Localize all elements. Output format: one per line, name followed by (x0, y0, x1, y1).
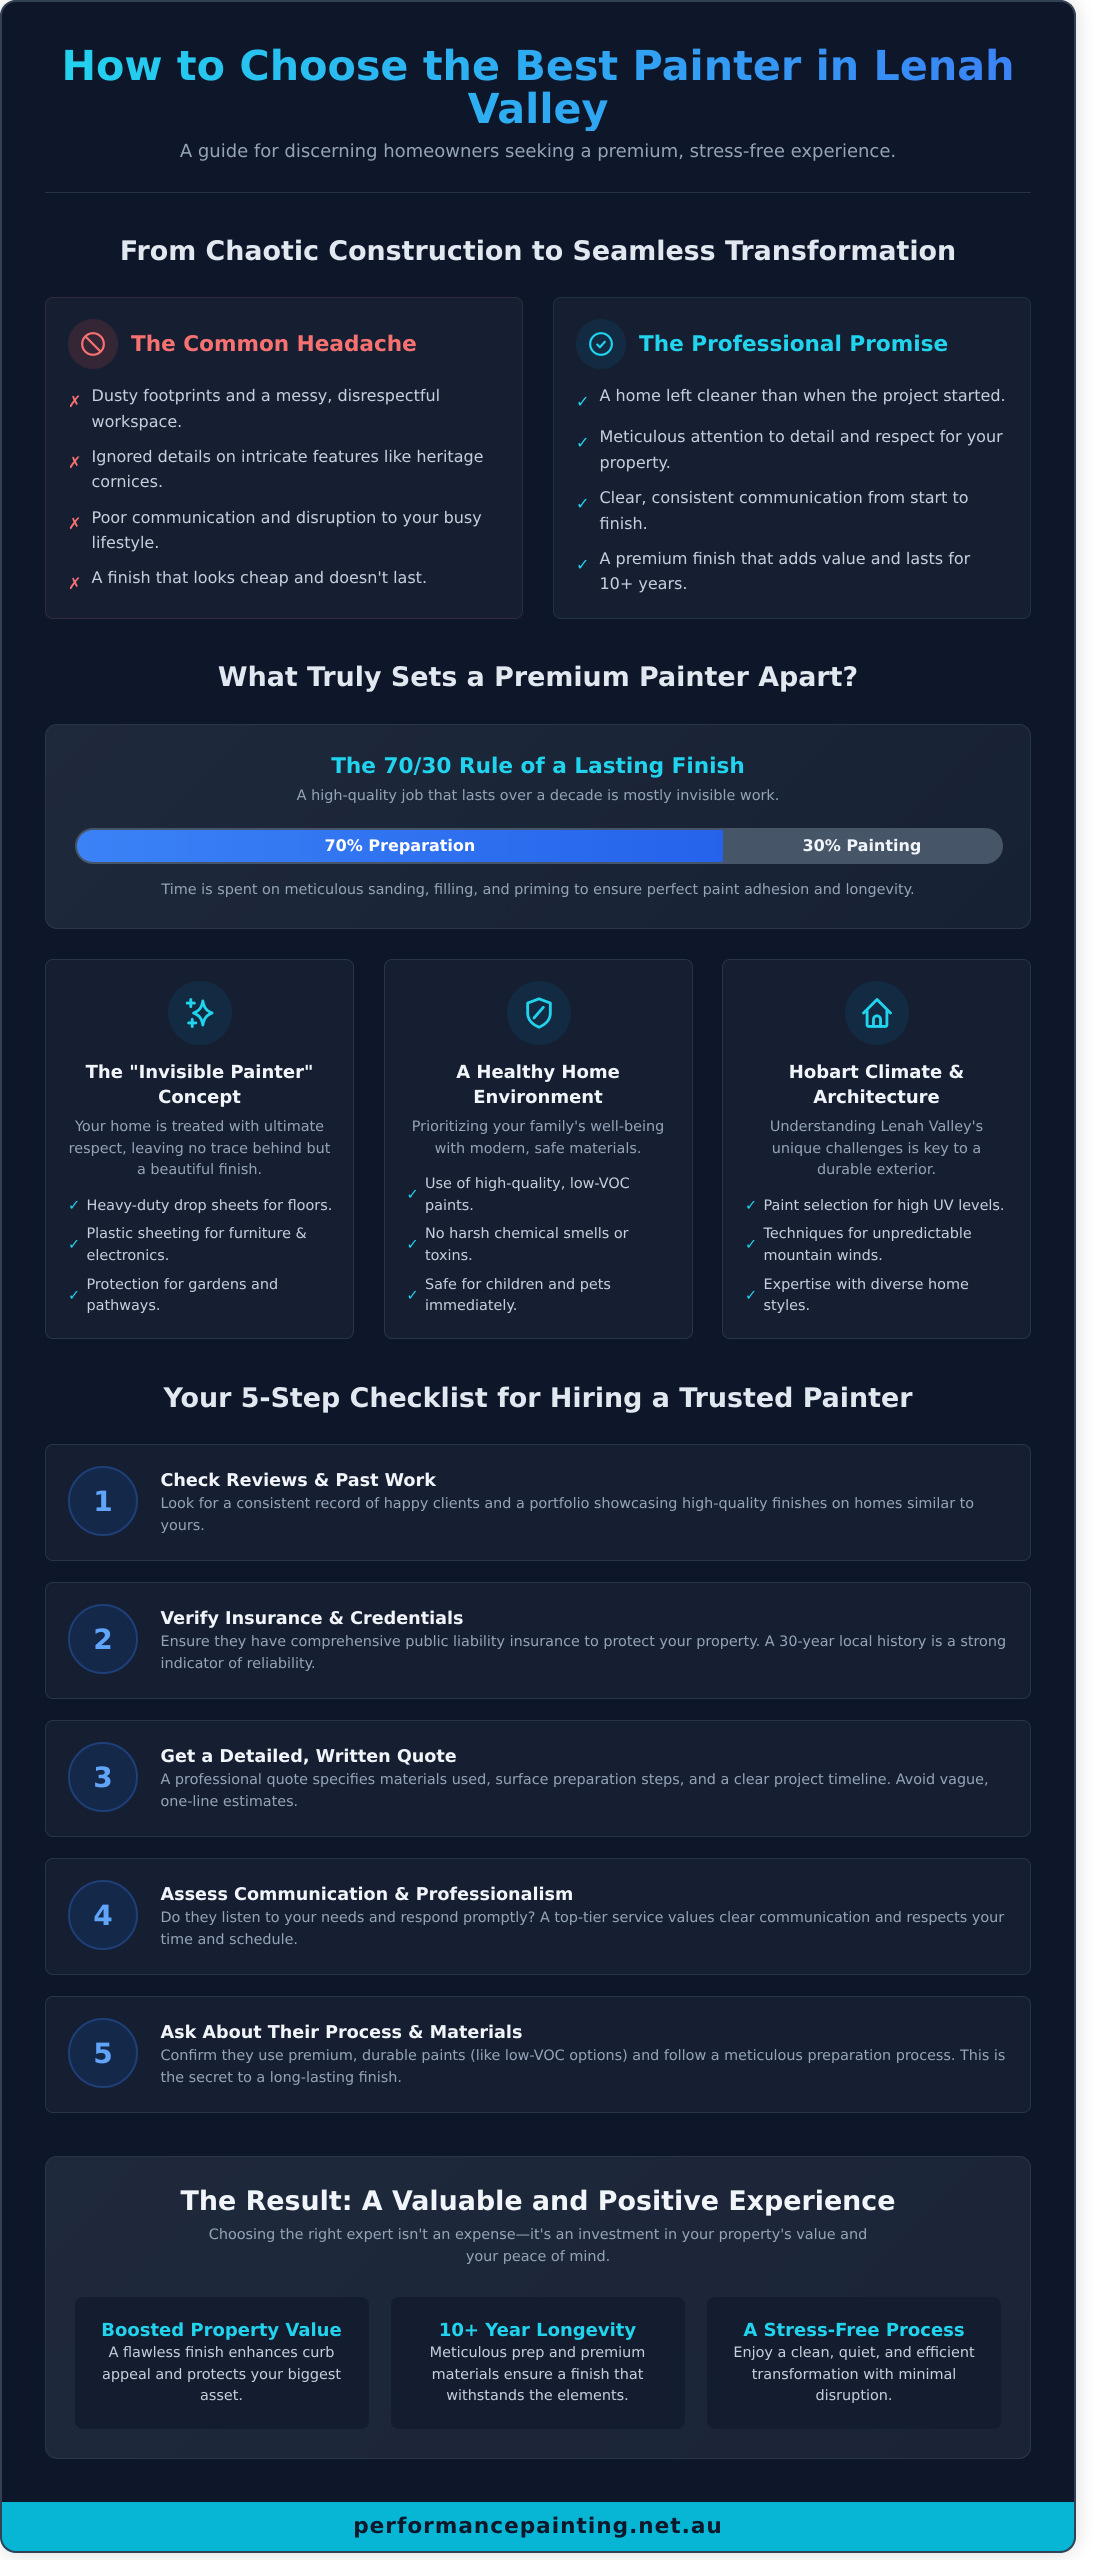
benefit text: transformation with minimal (752, 2367, 956, 2383)
card heading: Hobart Climate & (789, 1062, 964, 1083)
feature list: ✓ (406, 1187, 419, 1203)
panel: hobart climate (722, 959, 1031, 1339)
feature list: Heavy-duty drop sheets for floors. (86, 1198, 332, 1214)
feature list: Techniques for unpredictable (764, 1226, 972, 1242)
benefit text: A flawless finish enhances curb (109, 2345, 334, 2361)
rule caption: Time is spent on meticulous sanding, filling, and priming to ensure perfect paint adhesion and longevity. (161, 882, 915, 898)
step number (68, 2018, 138, 2088)
feature list (745, 1198, 1004, 1314)
icon: shield check (506, 981, 570, 1045)
feature list: ✓ (406, 1288, 419, 1304)
step description (160, 1772, 989, 1810)
step 2 (45, 1582, 1031, 1698)
step description: A professional quote specifies materials used, surface preparation steps, and a clear project timeline. Avoid vague, (160, 1772, 989, 1788)
feature list: ✓ (68, 1237, 80, 1253)
step number (68, 1880, 138, 1950)
panel: healthy home (384, 959, 692, 1339)
feature list: ✓ (745, 1288, 757, 1304)
list of problems: lifestyle. (92, 533, 159, 552)
card description: durable exterior. (817, 1162, 936, 1178)
list of problems: Ignored details on intricate features like heritage (92, 447, 484, 466)
list of promises: A home left cleaner than when the project started. (600, 386, 1006, 405)
feature list: Use of high-quality, low-VOC (425, 1176, 630, 1192)
step title: Assess Communication & Professionalism (160, 1884, 573, 1904)
feature list: pathways. (86, 1298, 160, 1314)
bar segment: preparation: 70% Preparation (324, 836, 475, 855)
feature list: immediately. (425, 1298, 517, 1314)
card description: unique challenges is key to a (772, 1141, 981, 1157)
card heading: Architecture (813, 1087, 940, 1108)
list of problems: Poor communication and disruption to your busy (92, 508, 482, 527)
feature list: ✓ (745, 1237, 757, 1253)
benefit text: Meticulous prep and premium (430, 2345, 645, 2361)
step description: one-line estimates. (160, 1794, 298, 1810)
benefit text: Enjoy a clean, quiet, and efficient (733, 2345, 975, 2361)
card description: with modern, safe materials. (435, 1141, 641, 1157)
card heading: The Common Headache (131, 332, 417, 357)
card heading (789, 1062, 964, 1108)
list of problems: A finish that looks cheap and doesn't last. (92, 568, 427, 587)
feature list: No harsh chemical smells or (425, 1226, 629, 1242)
panel: the result (45, 2156, 1031, 2459)
step title: Ask About Their Process & Materials (160, 2022, 522, 2042)
step description: Confirm they use premium, durable paints (like low-VOC options) and follow a meticulous preparation process. This is (160, 2048, 1005, 2064)
step 3 (45, 1720, 1031, 1836)
benefit text: withstands the elements. (446, 2388, 629, 2404)
title (45, 44, 1031, 131)
feature list: ✓ (68, 1288, 80, 1304)
list of promises: ✓ (576, 494, 589, 513)
list of promises (576, 386, 1006, 593)
step description: yours. (160, 1518, 205, 1534)
step description: Look for a consistent record of happy clients and a portfolio showcasing high-quality finishes on homes similar to (160, 1496, 974, 1512)
card heading: The Professional Promise (639, 332, 948, 357)
icon: check circle (576, 319, 626, 369)
list of problems: ✗ (68, 392, 81, 411)
progress bar 70 / 30 (74, 828, 1002, 864)
footer band: performancepainting.net.au (353, 2514, 723, 2538)
step number: 2 (93, 1623, 113, 1656)
result subtitle (209, 2227, 867, 2265)
feature list (68, 1198, 332, 1314)
feature list: mountain winds. (764, 1248, 883, 1264)
panel: 70/30 rule (45, 724, 1031, 929)
benefit title: Boosted Property Value (101, 2320, 342, 2341)
feature list: Expertise with diverse home (764, 1276, 969, 1292)
result subtitle: Choosing the right expert isn't an expense—it's an investment in your property's value and (209, 2227, 867, 2243)
step number (68, 1604, 138, 1674)
benefit: longevity (390, 2297, 684, 2429)
step number (68, 1466, 138, 1536)
benefit title: 10+ Year Longevity (439, 2320, 636, 2341)
feature list: ✓ (406, 1237, 419, 1253)
card description: a beautiful finish. (137, 1162, 262, 1178)
list of promises: ✓ (576, 433, 589, 452)
heading: transformation: From Chaotic Construction to Seamless Transformation (120, 236, 956, 267)
feature list: electronics. (86, 1248, 169, 1264)
benefit text (733, 2345, 975, 2404)
list of problems: cornices. (92, 472, 163, 491)
benefit title: A Stress-Free Process (743, 2320, 965, 2341)
card heading: Concept (158, 1087, 241, 1108)
card heading: A Healthy Home (456, 1062, 620, 1083)
bar segment: painting: 30% Painting (802, 836, 921, 855)
list of problems: workspace. (92, 412, 182, 431)
feature list: paints. (425, 1198, 474, 1214)
card description (69, 1119, 330, 1178)
step number: 3 (93, 1761, 113, 1794)
feature list: Paint selection for high UV levels. (764, 1198, 1004, 1214)
card heading: The "Invisible Painter" (86, 1062, 313, 1083)
step title: Verify Insurance & Credentials (160, 1608, 464, 1628)
step title: Get a Detailed, Written Quote (160, 1746, 457, 1766)
list of promises: Clear, consistent communication from start to (600, 488, 969, 507)
benefit text (102, 2345, 341, 2404)
subtitle: A guide for discerning homeowners seeking a premium, stress-free experience. (180, 141, 896, 162)
list of promises: A premium finish that adds value and lasts for (600, 549, 970, 568)
icon: ban (68, 319, 118, 369)
list of promises: Meticulous attention to detail and respect for your (600, 427, 1003, 446)
card description: Prioritizing your family's well-being (412, 1119, 664, 1135)
panel: invisible painter (45, 959, 354, 1339)
card description (412, 1119, 664, 1157)
icon: sparkles (168, 981, 232, 1045)
card description: respect, leaving no trace behind but (69, 1141, 330, 1157)
bar segment: preparation (76, 830, 723, 862)
feature list: toxins. (425, 1248, 473, 1264)
step 1 (45, 1444, 1031, 1560)
card description: Your home is treated with ultimate (75, 1119, 324, 1135)
benefit text: materials ensure a finish that (432, 2367, 643, 2383)
card heading (86, 1062, 313, 1108)
panel: the common headache (45, 297, 523, 619)
feature list (406, 1176, 630, 1314)
feature list: styles. (764, 1298, 810, 1314)
step number (68, 1742, 138, 1812)
benefit text: asset. (200, 2388, 243, 2404)
benefit text (430, 2345, 645, 2404)
step description: Do they listen to your needs and respond promptly? A top-tier service values clear communication and respects your (160, 1910, 1004, 1926)
list of promises: ✓ (576, 555, 589, 574)
step 5 (45, 1996, 1031, 2112)
benefit: stress-free (707, 2297, 1001, 2429)
step description (160, 1496, 974, 1534)
step description (160, 1910, 1004, 1948)
result heading: The Result: A Valuable and Positive Experience (181, 2186, 895, 2216)
card heading (456, 1062, 620, 1108)
card description: Understanding Lenah Valley's (770, 1119, 983, 1135)
step description: the secret to a long-lasting finish. (160, 2070, 402, 2086)
list of promises: ✓ (576, 392, 589, 411)
card heading: Environment (473, 1087, 603, 1108)
step description (160, 1634, 1006, 1672)
feature list: Plastic sheeting for furniture & (86, 1226, 307, 1242)
feature list: Safe for children and pets (425, 1276, 611, 1292)
list of problems: Dusty footprints and a messy, disrespectful (92, 386, 440, 405)
list of problems: ✗ (68, 574, 81, 593)
step number: 1 (93, 1485, 113, 1518)
step description: Ensure they have comprehensive public liability insurance to protect your property. A 30-year local history is a strong (160, 1634, 1006, 1650)
card description (770, 1119, 983, 1178)
result subtitle: your peace of mind. (466, 2249, 610, 2265)
step description: indicator of reliability. (160, 1656, 316, 1672)
heading: checklist: Your 5-Step Checklist for Hiring a Trusted Painter (164, 1383, 912, 1414)
feature list: ✓ (68, 1198, 80, 1214)
title: How to Choose the Best Painter in Lenah (61, 42, 1015, 90)
heading: premium painter: What Truly Sets a Premium Painter Apart? (218, 662, 858, 693)
benefit: property value (74, 2297, 368, 2429)
footer band (0, 2502, 1076, 2553)
list of promises: 10+ years. (600, 574, 687, 593)
title: Valley (468, 85, 608, 133)
icon: house (845, 981, 909, 1045)
step description: time and schedule. (160, 1932, 298, 1948)
list of problems (68, 386, 484, 593)
step description (160, 2048, 1005, 2086)
step 4 (45, 1858, 1031, 1974)
panel: the professional promise (553, 297, 1031, 619)
step title: Check Reviews & Past Work (160, 1470, 436, 1490)
list of promises: property. (600, 453, 671, 472)
rule heading: The 70/30 Rule of a Lasting Finish (331, 754, 745, 779)
benefit text: disruption. (816, 2388, 892, 2404)
list of promises: finish. (600, 514, 648, 533)
step number: 4 (93, 1899, 113, 1932)
list of problems: ✗ (68, 453, 81, 472)
step number: 5 (93, 2037, 113, 2070)
list of problems: ✗ (68, 514, 81, 533)
feature list: Protection for gardens and (86, 1276, 278, 1292)
rule subtitle: A high-quality job that lasts over a decade is mostly invisible work. (297, 788, 779, 804)
feature list: ✓ (745, 1198, 757, 1214)
benefit text: appeal and protects your biggest (102, 2367, 341, 2383)
